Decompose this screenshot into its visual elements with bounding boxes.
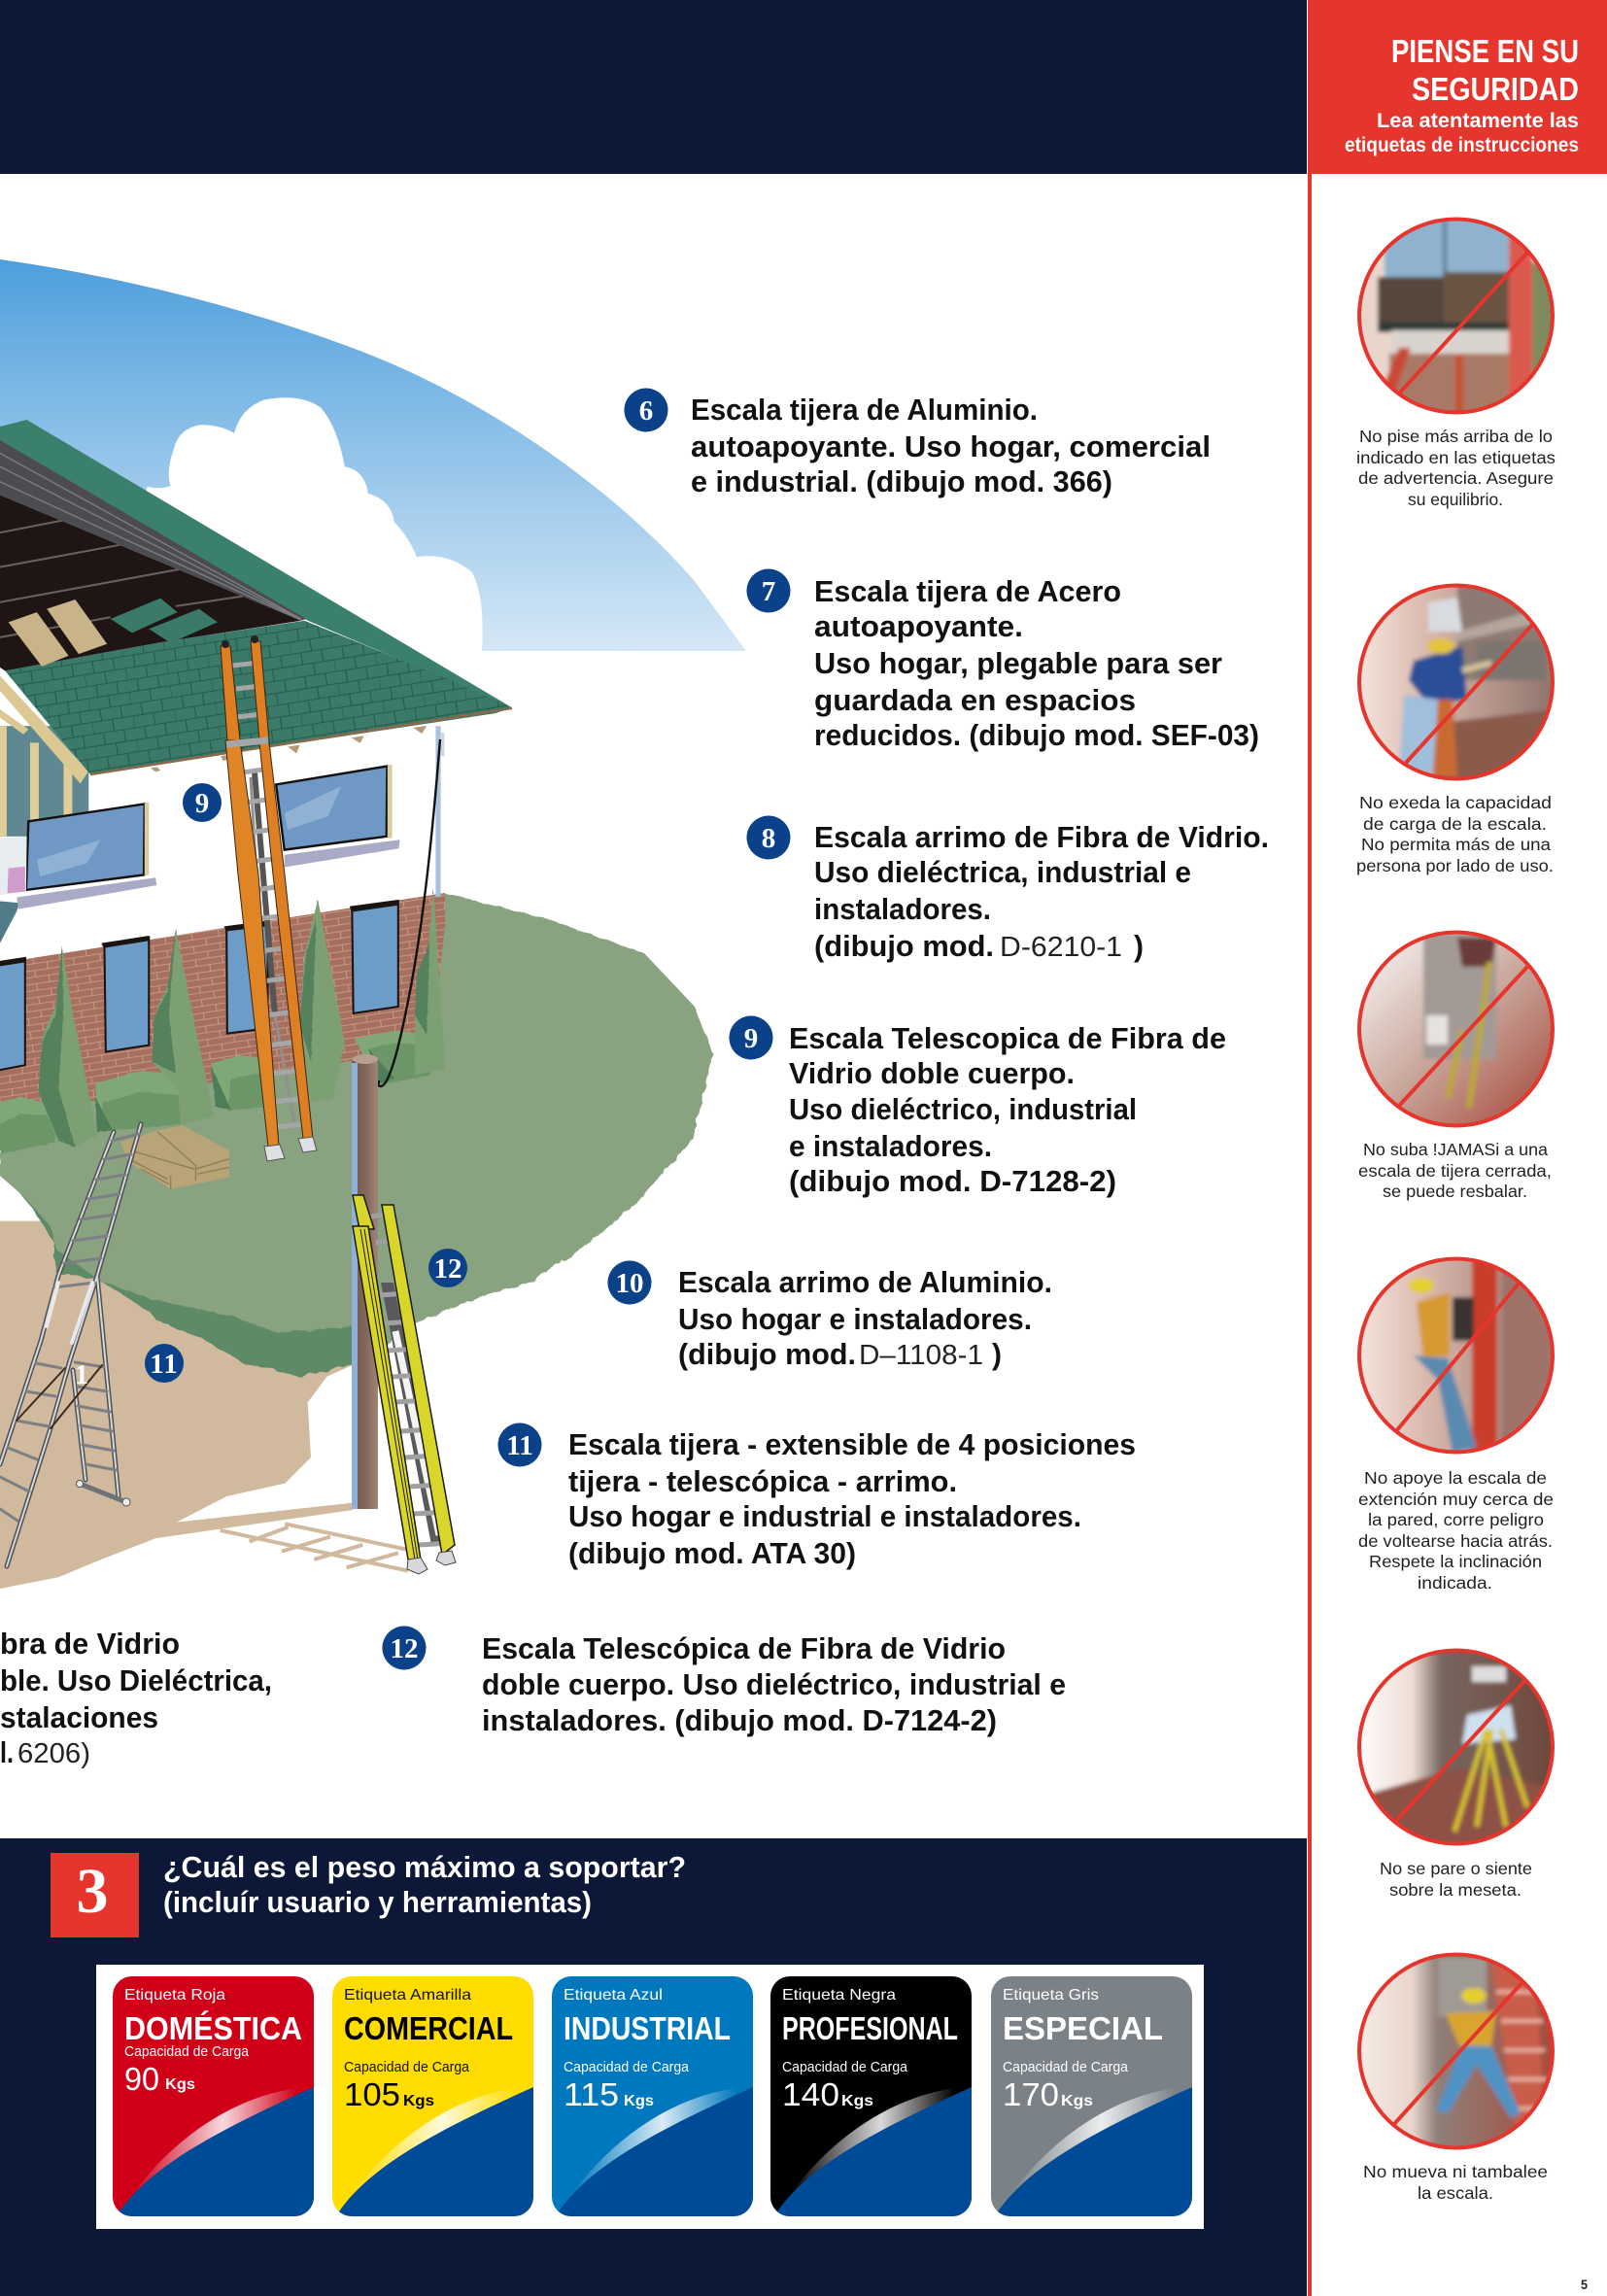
label: doméstica: 90	[124, 2061, 159, 2097]
caption 1: de advertencia. Asegure	[1358, 468, 1554, 488]
brick wall and windows	[0, 888, 445, 1189]
white label panel	[96, 1965, 1204, 2229]
label: comercial: Kgs	[403, 2093, 434, 2109]
sidebar header: SEGURIDAD	[1412, 71, 1579, 107]
item 6: 6	[639, 395, 653, 427]
label: especial: Capacidad de Carga	[1003, 2059, 1129, 2075]
caption 1: No pise más arriba de lo	[1359, 427, 1553, 446]
caption 2: persona por lado de uso.	[1356, 856, 1554, 875]
label: comercial: Etiqueta Amarilla	[344, 1987, 471, 2004]
label: comercial	[332, 1976, 533, 2216]
label: doméstica	[113, 1976, 314, 2216]
label: especial: Etiqueta Gris	[1003, 1987, 1099, 2004]
item 10 cut-off text at left edge: stalaciones	[0, 1700, 158, 1734]
caption 5: sobre la meseta.	[1389, 1880, 1522, 1900]
sky	[0, 259, 746, 651]
item 10 cut-off text at left edge: bra de Vidrio	[0, 1627, 180, 1661]
item 10: (dibujo mod.	[678, 1337, 856, 1371]
item 8: instaladores.	[814, 892, 991, 926]
safety photo 2: overloaded ladder	[1355, 583, 1559, 787]
item 9: Escala Telescopica de Fibra de	[789, 1021, 1226, 1055]
item 11: tijera - telescópica - arrimo.	[568, 1464, 957, 1498]
safety photo 4: ladder too close to wall	[1355, 1253, 1559, 1457]
label: profesional: Capacidad de Carga	[782, 2059, 908, 2075]
hedges	[0, 888, 445, 1154]
item 10: D–1108-1	[859, 1340, 983, 1371]
stray mark: 1	[75, 1360, 88, 1390]
caption 4: extención muy cerca de	[1358, 1490, 1554, 1509]
item 8: Uso dieléctrica, industrial e	[814, 855, 1191, 889]
item 7: 7	[762, 576, 775, 607]
caption 4: de voltearse hacia atrás.	[1358, 1531, 1553, 1551]
trees	[39, 946, 97, 1148]
loose planks	[9, 612, 69, 667]
sidebar header	[1308, 0, 1607, 174]
label: industrial: INDUSTRIAL	[564, 2010, 731, 2046]
teal gable base	[0, 902, 19, 943]
item 11	[497, 1422, 1136, 1570]
right sill	[285, 840, 400, 868]
item 10	[608, 1261, 1052, 1371]
item 10 cut-off text at left edge: l.	[0, 1735, 14, 1769]
label: industrial: Kgs	[624, 2093, 654, 2109]
illustration: house with ladders	[0, 259, 746, 1589]
item 8: (dibujo mod.	[814, 929, 994, 963]
caption 2: de carga de la escala.	[1363, 814, 1547, 834]
upper right window	[276, 767, 387, 850]
safety photo 1: standing too high	[1355, 214, 1559, 418]
label: comercial: Capacidad de Carga	[344, 2059, 470, 2075]
left sill	[17, 877, 156, 909]
item 11: Uso hogar e industrial e instaladores.	[568, 1499, 1081, 1533]
caption 4: indicada.	[1418, 1573, 1492, 1593]
caption 6: No mueva ni tambalee	[1363, 2162, 1548, 2181]
label: industrial: 115	[564, 2076, 619, 2112]
item 7: autoapoyante.	[814, 609, 1023, 643]
gable glazing	[0, 726, 88, 837]
label: especial: ESPECIAL	[1003, 2010, 1163, 2046]
section heading	[163, 1850, 686, 1919]
item 10 cut-off text at left edge: ble. Uso Dieléctrica,	[0, 1663, 272, 1697]
item 11: (dibujo mod. ATA 30)	[568, 1536, 856, 1570]
item 9: Uso dieléctrico, industrial	[789, 1092, 1137, 1126]
item 8: D-6210-1	[1000, 932, 1122, 963]
item 9: Vidrio doble cuerpo.	[789, 1056, 1075, 1090]
lawn	[0, 893, 713, 1346]
item 10: Uso hogar e instaladores.	[678, 1302, 1032, 1336]
caption 5	[1380, 1859, 1532, 1900]
badge 9 on house: 9	[195, 788, 209, 819]
orange ladder	[221, 635, 317, 1161]
label: profesional: Kgs	[841, 2093, 873, 2109]
label: profesional: PROFESIONAL	[782, 2010, 958, 2046]
silver ladder	[0, 1124, 141, 1566]
label: comercial: 105	[344, 2076, 400, 2112]
label: industrial: Etiqueta Azul	[564, 1987, 663, 2004]
dark lawn edge	[0, 1166, 369, 1377]
item 12: 12	[391, 1633, 418, 1664]
item 11: 11	[506, 1430, 533, 1461]
lumber stack	[120, 1125, 229, 1189]
caption 4	[1358, 1468, 1554, 1593]
safety photo 5: sitting on the top cap	[1355, 1647, 1559, 1846]
badge 11 on ground: 11	[150, 1349, 179, 1380]
sandy ground	[0, 1221, 357, 1589]
item 12: Escala Telescópica de Fibra de Vidrio	[482, 1631, 1006, 1665]
label: comercial: COMERCIAL	[344, 2010, 513, 2046]
item 7: Escala tijera de Acero	[814, 574, 1121, 608]
item 12	[383, 1627, 1066, 1737]
section number 3: 3	[76, 1856, 109, 1927]
item 8: Escala arrimo de Fibra de Vidrio.	[814, 820, 1269, 854]
panel: section 3 maximum load	[0, 1838, 1307, 2296]
item 9: (dibujo mod. D-7128-2)	[789, 1164, 1116, 1198]
label: especial: 170	[1003, 2076, 1059, 2112]
label: industrial: Capacidad de Carga	[564, 2059, 690, 2075]
caption 4: Respete la inclinación	[1369, 1552, 1542, 1571]
badge 9 on house	[183, 783, 222, 822]
item 6: e industrial. (dibujo mod. 366)	[691, 464, 1112, 498]
label: profesional: 140	[782, 2076, 839, 2112]
item 7: reducidos. (dibujo mod. SEF-03)	[814, 718, 1259, 752]
label: doméstica: Etiqueta Roja	[124, 1987, 225, 2004]
caption 3	[1358, 1140, 1552, 1201]
label: profesional	[770, 1976, 972, 2216]
upper left window	[26, 804, 145, 890]
caption 3: escala de tijera cerrada,	[1358, 1161, 1552, 1181]
caption 3: se puede resbalar.	[1383, 1182, 1527, 1201]
badge 11 on ground	[145, 1344, 184, 1383]
page number: 5	[1581, 2277, 1588, 2292]
caption 1: indicado en las etiquetas	[1356, 448, 1556, 467]
downspout	[435, 726, 441, 897]
label: especial	[991, 1976, 1192, 2216]
item 8: )	[1134, 929, 1144, 963]
yellow ladder	[353, 1195, 456, 1574]
label: especial: Kgs	[1061, 2093, 1093, 2109]
green ridge strip	[0, 420, 512, 707]
item 11: Escala tijera - extensible de 4 posiciones	[568, 1427, 1136, 1461]
caption 5: No se pare o siente	[1380, 1859, 1532, 1878]
gray underlayment band	[0, 440, 306, 621]
safety photo 6: shaking the ladder	[1355, 1951, 1559, 2151]
caption 4: la pared, corre peligro	[1368, 1510, 1544, 1529]
item 9	[729, 1016, 1226, 1198]
label: doméstica: DOMÉSTICA	[124, 2010, 302, 2046]
badge 12 on lawn	[428, 1249, 467, 1287]
caption 1: su equilibrio.	[1408, 490, 1503, 509]
sidebar header: etiquetas de instrucciones	[1345, 134, 1579, 156]
caption 1	[1356, 427, 1556, 509]
top navy band	[0, 0, 1307, 174]
caption 2	[1356, 793, 1554, 875]
upper wall, gable and roof	[0, 420, 512, 909]
section number 3	[51, 1853, 139, 1937]
caption 2: No permita más de una	[1361, 835, 1551, 854]
safety photo 3: closed stepladder	[1355, 928, 1559, 1132]
item 9: e instaladores.	[789, 1129, 992, 1163]
item 7	[746, 569, 1259, 752]
cloud	[100, 397, 483, 669]
loose shingles	[111, 599, 178, 633]
caption 6: la escala.	[1418, 2183, 1493, 2203]
ladder shadow on ground	[221, 1524, 408, 1571]
open roof deck	[0, 496, 301, 670]
curtain	[0, 837, 27, 895]
pole	[352, 1054, 378, 1509]
item 6: Escala tijera de Aluminio.	[691, 393, 1038, 427]
sidebar header: Lea atentamente las	[1377, 110, 1579, 132]
item 12: doble cuerpo. Uso dieléctrico, industrial e	[482, 1667, 1066, 1701]
caption 3: No suba !JAMASi a una	[1363, 1140, 1548, 1159]
item 12: instaladores. (dibujo mod. D-7124-2)	[482, 1703, 997, 1737]
caption 4: No apoye la escala de	[1364, 1468, 1547, 1488]
caption 2: No exeda la capacidad	[1359, 793, 1552, 812]
item 10 cut-off text at left edge	[0, 1627, 272, 1769]
item 6: autoapoyante. Uso hogar, comercial	[691, 429, 1211, 463]
label: profesional: Etiqueta Negra	[782, 1987, 896, 2004]
badge 12 on lawn: 12	[433, 1253, 462, 1285]
utility cable	[378, 739, 440, 1086]
item 10: )	[992, 1337, 1002, 1371]
item 10 cut-off text at left edge: 6206)	[17, 1738, 90, 1769]
label: industrial	[552, 1976, 753, 2216]
label: doméstica: Kgs	[165, 2076, 195, 2093]
item 10: Escala arrimo de Aluminio.	[678, 1265, 1052, 1299]
section heading: (incluír usuario y herramientas)	[163, 1885, 592, 1919]
item 8	[746, 816, 1269, 963]
item 6	[624, 389, 1211, 498]
item 7: Uso hogar, plegable para ser	[814, 646, 1222, 680]
sidebar red rule	[1308, 174, 1312, 2296]
caption 6	[1363, 2162, 1548, 2203]
item 9: 9	[744, 1023, 758, 1054]
item 10: 10	[616, 1268, 643, 1299]
item 8: 8	[762, 823, 775, 854]
section heading: ¿Cuál es el peso máximo a soportar?	[163, 1850, 686, 1884]
shingled slope	[5, 621, 512, 774]
item 7: guardada en espacios	[814, 683, 1136, 717]
label: doméstica: Capacidad de Carga	[124, 2043, 250, 2060]
